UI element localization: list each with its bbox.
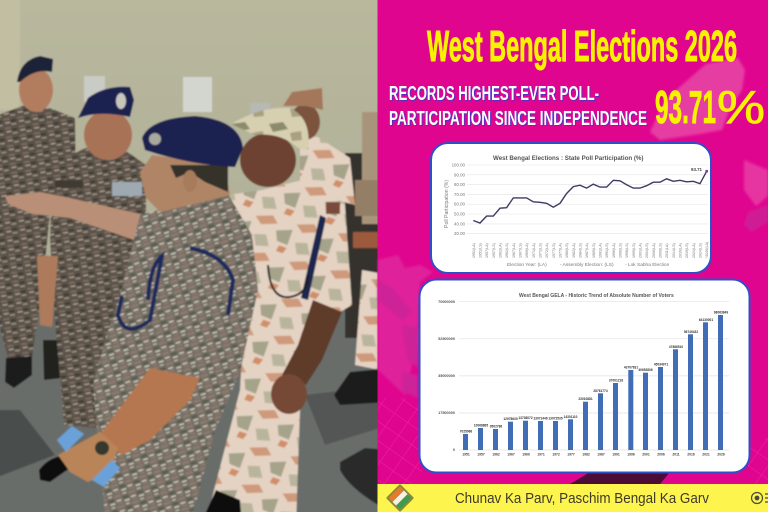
x axis election labels: 1957(LS) bbox=[492, 243, 496, 258]
bar value labels: 13072535 bbox=[548, 416, 563, 420]
x axis election labels: *2026(LA) bbox=[705, 242, 709, 258]
bar value labels: 47886510 bbox=[669, 345, 683, 349]
x axis election labels: 1987(LA) bbox=[585, 243, 589, 258]
right magenta background panel bbox=[378, 0, 768, 512]
year axis labels: 1982 bbox=[582, 452, 590, 456]
x axis election labels: 1991(LS) bbox=[605, 243, 609, 258]
poll participation line bbox=[473, 171, 707, 223]
map watermark: left dark lobes bbox=[378, 280, 420, 398]
x axis election labels: 1998(LS) bbox=[625, 243, 629, 258]
y axis gridlines and labels: 50.00 bbox=[454, 212, 466, 216]
bar value labels: 9502786 bbox=[490, 424, 502, 428]
x axis election labels: 2001(LA) bbox=[639, 243, 643, 258]
person: front officer pointing bbox=[5, 116, 258, 512]
x axis election labels: 1999(LS) bbox=[632, 243, 636, 258]
year axis labels: 1987 bbox=[597, 452, 605, 456]
bar value labels: 13071446 bbox=[533, 416, 548, 420]
y axis gridlines and labels: 100.00 bbox=[452, 162, 466, 168]
icon: chat logo bbox=[752, 492, 768, 504]
panel: state poll participation line chart bbox=[431, 143, 711, 273]
x axis election labels: 2006(LA) bbox=[652, 243, 656, 258]
person: middle officer bbox=[37, 87, 146, 482]
panel: state poll participation line chart: - Assembly Election: (LS) bbox=[560, 262, 614, 268]
voter count bars bbox=[463, 315, 723, 450]
year axis labels: 1967 bbox=[507, 452, 515, 456]
photo: security officers at polling venue bbox=[0, 0, 390, 512]
x axis election labels bbox=[472, 242, 709, 258]
year axis labels: 2001 bbox=[642, 452, 650, 456]
x axis election labels: 1982(LA) bbox=[572, 243, 576, 258]
year axis labels: 1996 bbox=[627, 452, 635, 456]
year axis labels: 2016 bbox=[687, 452, 695, 456]
y axis gridlines and labels: 70.00 bbox=[454, 192, 466, 197]
x axis election labels: 1989(LS) bbox=[592, 243, 596, 258]
x axis election labels: 1971(LS) bbox=[539, 243, 543, 258]
panel: absolute voters bar chart bbox=[420, 280, 750, 472]
subtitle: RECORDS HIGHEST-EVER POLL- bbox=[389, 83, 599, 105]
x axis election labels: 1957(LA) bbox=[485, 243, 489, 258]
year axis labels: 1991 bbox=[612, 452, 620, 456]
bar value labels: 64130001 bbox=[699, 318, 713, 322]
y axis gridlines and labels: 80.00 bbox=[454, 182, 466, 187]
bar value labels: 13738072 bbox=[518, 416, 533, 420]
x axis election labels: 2021(LA) bbox=[692, 243, 696, 258]
year axis labels: 1957 bbox=[477, 452, 485, 456]
subtitle: RECORDS HIGHEST-EVER POLL- bbox=[390, 84, 600, 106]
person: left officer bbox=[0, 56, 76, 388]
bar value labels: 12978630 bbox=[503, 417, 518, 421]
bar value labels: 14301110 bbox=[564, 415, 578, 419]
x axis election labels: 1996(LA) bbox=[612, 243, 616, 258]
year axis labels: 1972 bbox=[552, 452, 560, 456]
y axis gridlines and labels: 60.00 bbox=[454, 202, 466, 207]
gridlines and y axis labels: 35000000 bbox=[438, 374, 455, 378]
y axis gridlines and labels: 40.00 bbox=[454, 221, 466, 226]
y axis title: Poll Participation (%) bbox=[444, 180, 450, 228]
y axis gridlines and labels bbox=[452, 162, 708, 236]
bar value labels: 45034971 bbox=[654, 362, 668, 366]
person: ITBP officer in camouflage cap bbox=[200, 108, 352, 512]
x axis election labels: 2016(LA) bbox=[679, 243, 683, 258]
x axis election labels: 1962(LS) bbox=[505, 243, 509, 258]
x axis election labels: 2014(LS) bbox=[672, 243, 676, 258]
bar value labels: 68063849 bbox=[714, 310, 728, 314]
x axis election labels: 1969(LA) bbox=[525, 243, 529, 258]
map watermark: right dark lobe bbox=[744, 205, 768, 232]
x axis election labels: 2024(LS) bbox=[699, 243, 703, 258]
year axis labels: 2011 bbox=[672, 452, 680, 456]
bar value labels: 56749432 bbox=[684, 330, 698, 334]
x axis election labels: 1977(LA) bbox=[559, 243, 563, 258]
map watermark: left bbox=[378, 255, 433, 395]
lattice sketch: lower left bbox=[378, 398, 422, 484]
bar value labels: 28761774 bbox=[593, 389, 608, 393]
gridlines and y axis labels: 17500000 bbox=[438, 411, 455, 415]
x axis election labels: 1967(LA) bbox=[512, 243, 516, 258]
y axis gridlines and labels: 90.00 bbox=[454, 172, 466, 177]
x axis election labels: 1977(LS) bbox=[552, 243, 556, 258]
map watermark: right bbox=[744, 160, 768, 206]
year axis labels: 2021 bbox=[702, 452, 710, 456]
year axis labels: 1971 bbox=[537, 452, 545, 456]
icon: EVM ballot tricolour bbox=[386, 484, 414, 512]
x axis election labels: 1962(LA) bbox=[499, 243, 503, 258]
legend: Election Year: (LA) bbox=[507, 262, 547, 268]
bar value labels bbox=[460, 310, 728, 434]
x axis election labels: 2009(LS) bbox=[659, 243, 663, 258]
bar value labels: 43707831 bbox=[624, 366, 638, 370]
x axis election labels: 2011(LA) bbox=[665, 243, 669, 258]
x axis election labels: 1980(LS) bbox=[565, 243, 569, 258]
footer band bbox=[378, 484, 768, 512]
lattice sketch: lower right bbox=[748, 438, 768, 484]
bar value labels: 23010881 bbox=[578, 397, 593, 401]
dark strip under chart bbox=[570, 472, 670, 484]
x axis election labels: 2004(LS) bbox=[645, 243, 649, 258]
bar value labels: 40652806 bbox=[638, 368, 653, 372]
bar value labels: 37001218 bbox=[609, 378, 623, 382]
peak value label: 93.71 bbox=[691, 167, 703, 172]
person: right edge leg and boots bbox=[334, 269, 378, 506]
x axis election labels: 1951(LA) bbox=[472, 243, 476, 258]
subtitle: PARTICIPATION SINCE INDEPENDENCE bbox=[389, 108, 647, 130]
chart title: West Bengal Elections : State Poll Participation (%) bbox=[493, 155, 643, 162]
subtitle bbox=[389, 83, 648, 131]
year axis labels: 1951 bbox=[462, 452, 470, 456]
x axis election labels: 1984(LS) bbox=[579, 243, 583, 258]
x axis election labels: 2019(LS) bbox=[685, 243, 689, 258]
y axis gridlines and labels: 30.00 bbox=[454, 231, 466, 236]
gridlines and y axis labels: 70000000 bbox=[438, 300, 455, 304]
bar value labels: 10068865 bbox=[474, 424, 488, 428]
year axis labels: 2026 bbox=[717, 452, 725, 456]
x axis election labels: 1991(LA) bbox=[599, 243, 603, 258]
x axis election labels: 1951(LS) bbox=[479, 243, 483, 258]
gridlines and y axis labels: 52500000 bbox=[438, 337, 455, 341]
gridlines and y axis labels bbox=[438, 300, 729, 452]
x axis election labels: 1971(LA) bbox=[532, 243, 536, 258]
headline percentage: 93.71 bbox=[655, 81, 716, 133]
year axis labels: 2006 bbox=[657, 452, 665, 456]
bar value labels: 7025066 bbox=[460, 430, 472, 434]
x axis election labels: 1996(LS) bbox=[619, 243, 623, 258]
year axis labels: 1969 bbox=[522, 452, 530, 456]
year axis labels: 1962 bbox=[492, 452, 500, 456]
map watermark: upper bbox=[650, 58, 745, 140]
gridlines and y axis labels: 0 bbox=[453, 448, 455, 452]
footer slogan: Chunav Ka Parv, Paschim Bengal Ka Garv bbox=[455, 490, 709, 507]
x axis election labels: 1967(LS) bbox=[519, 243, 523, 258]
year axis labels: 1977 bbox=[567, 452, 575, 456]
person: back ITBP officer bbox=[283, 88, 355, 205]
x axis election labels: 1972(LA) bbox=[545, 243, 549, 258]
headline percentage: % bbox=[717, 81, 765, 133]
year axis labels bbox=[462, 452, 725, 456]
panel: state poll participation line chart: - Lok Sabha Election bbox=[625, 262, 670, 268]
subtitle: PARTICIPATION SINCE INDEPENDENCE bbox=[390, 109, 648, 131]
chart title: West Bengal GELA - Historic Trend of Absolute Number of Voters bbox=[519, 293, 674, 299]
